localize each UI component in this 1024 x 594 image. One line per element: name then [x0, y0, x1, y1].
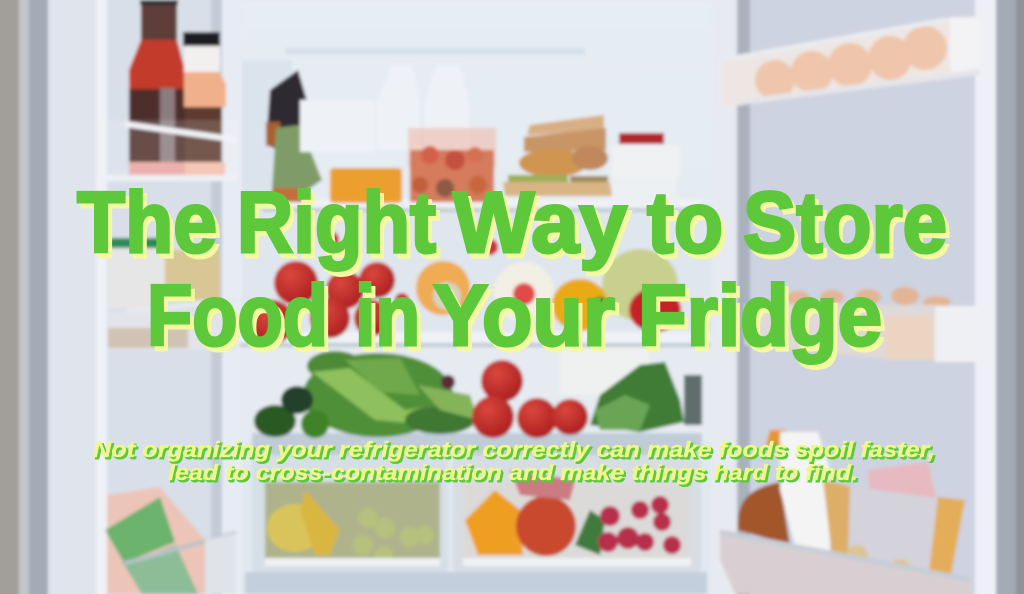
- title line 2: [147, 268, 882, 364]
- stacked containers: [612, 133, 680, 204]
- tomatoes lower shelf: [472, 360, 588, 438]
- title line 2: Fridge: [638, 268, 882, 364]
- left door bin: [107, 120, 238, 181]
- spinach: [590, 362, 702, 432]
- subtitle line 1: Not organizing your refrigerator correctly can make foods spoil faster,: [93, 437, 935, 462]
- title line 1 shadow: Store: [747, 180, 951, 276]
- title line 1: The: [77, 175, 217, 271]
- tomato tub: [408, 128, 496, 202]
- title line 1 shadow: [81, 180, 951, 276]
- right door second tray: [745, 287, 977, 362]
- title line 1: to: [647, 175, 723, 271]
- title line 2 shadow: in: [359, 273, 424, 369]
- title line 1: Store: [743, 175, 947, 271]
- peppers and cabbage: [552, 249, 681, 332]
- title line 2: Your: [433, 268, 615, 364]
- title line 1: Right: [237, 175, 436, 271]
- jar: [183, 32, 226, 178]
- milk bottles: [300, 65, 470, 152]
- cucumbers: [254, 386, 329, 438]
- left door liner: [48, 0, 242, 594]
- left middle bin contents: [108, 238, 238, 350]
- title line 2 shadow: [151, 273, 886, 369]
- left crisper drawer: [252, 455, 448, 572]
- title line 2 shadow: Food: [151, 273, 332, 369]
- subtitle line 2: lead to cross-contamination and make things hard to find.: [170, 462, 860, 487]
- right door egg tray: [722, 16, 980, 106]
- title line 2 shadow: Fridge: [642, 273, 886, 369]
- cheese tub: [330, 168, 402, 203]
- subtitle: [93, 437, 937, 487]
- subtitle line 2: lead to cross-contamination and make things hard to find.: [168, 460, 858, 485]
- right door liner: [712, 0, 996, 594]
- title line 1: [77, 175, 947, 271]
- bag of greens: [266, 70, 322, 202]
- lower left bin: [105, 487, 236, 594]
- title line 2: in: [355, 268, 420, 364]
- title line 2 shadow: Your: [437, 273, 619, 369]
- title line 2: Food: [147, 268, 328, 364]
- title line 1 shadow: to: [651, 180, 727, 276]
- sandwiches: [503, 115, 612, 196]
- small background tomatoes: [321, 231, 498, 307]
- title line 1: Way: [453, 175, 627, 271]
- title line 1 shadow: Right: [241, 180, 440, 276]
- interior back wall: [242, 0, 712, 440]
- shelves: [240, 199, 710, 594]
- sauce bottle: [129, 0, 185, 175]
- lettuce: [303, 351, 478, 437]
- title: [77, 175, 951, 369]
- title line 1 shadow: The: [81, 180, 221, 276]
- tomatoes on middle shelf: [250, 261, 395, 344]
- left steel edge: [0, 0, 48, 594]
- title line 1 shadow: Way: [457, 180, 631, 276]
- right steel edge: [996, 0, 1024, 594]
- lower right door items: [720, 430, 970, 594]
- orange slice and plate: [416, 261, 554, 322]
- right crisper drawer: [453, 455, 701, 572]
- subtitle line 1: Not organizing your refrigerator correctly can make foods spoil faster,: [95, 439, 937, 464]
